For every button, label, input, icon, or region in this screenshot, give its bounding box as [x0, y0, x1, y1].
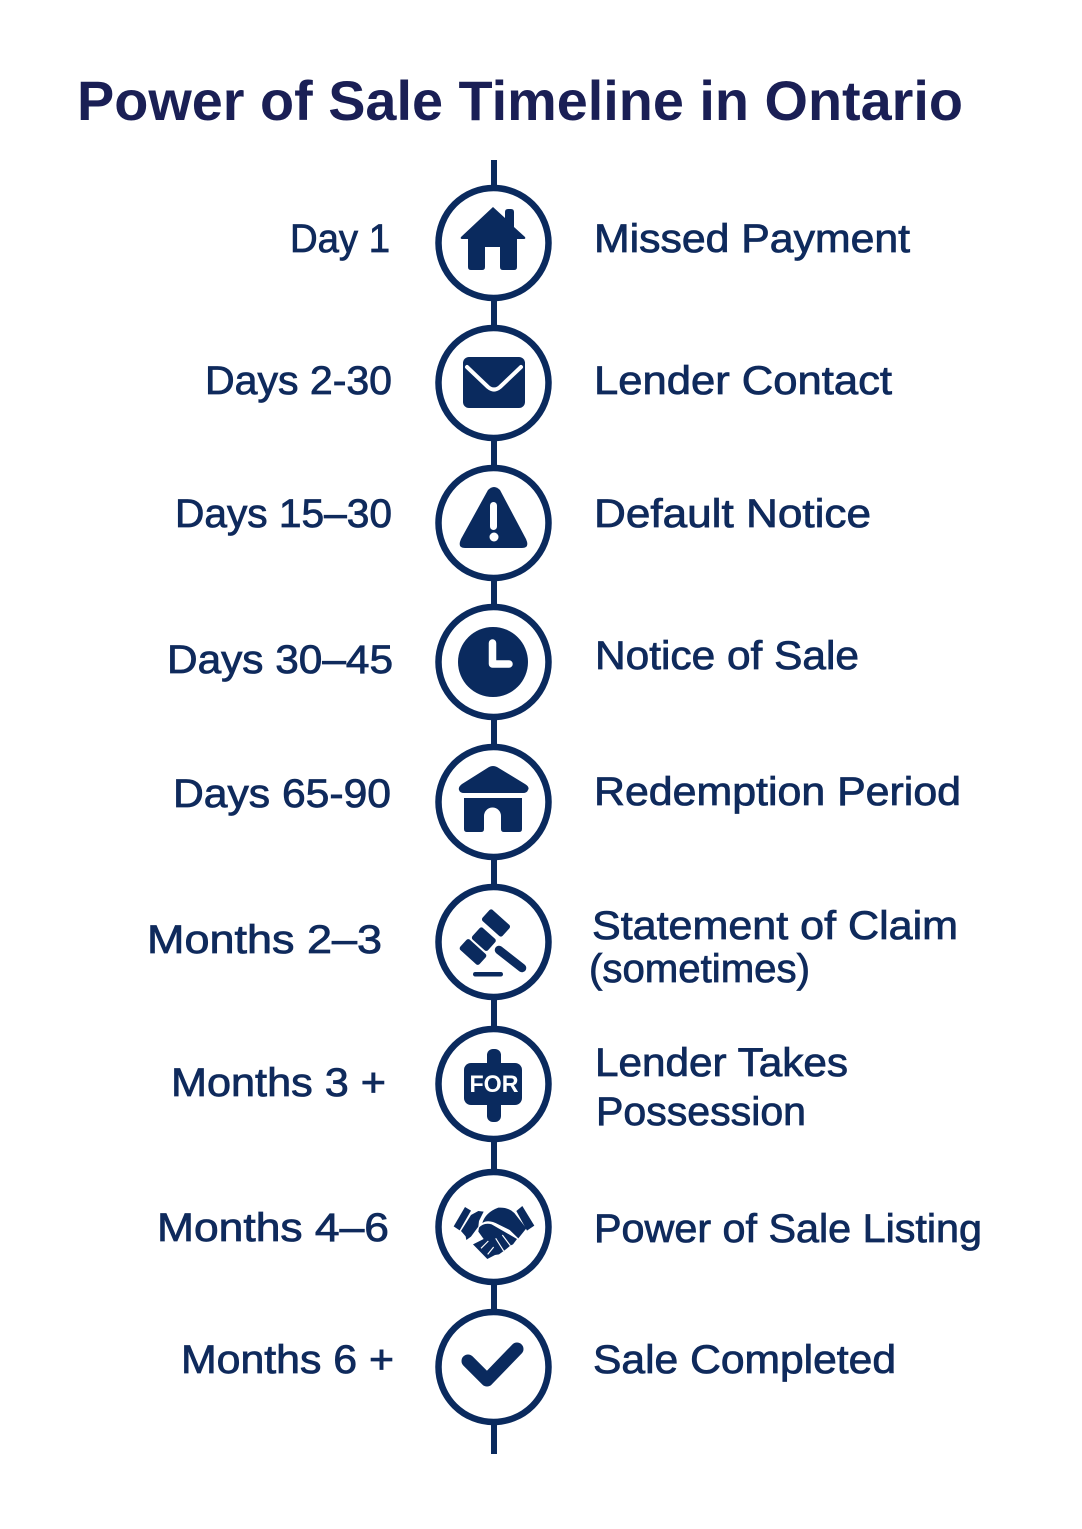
step 1: Day 1: Day 1: [290, 217, 390, 261]
step 1: Day 1: Missed Payment: [594, 217, 910, 261]
step 7: Months 3 +: Months 3 +: [171, 1061, 386, 1105]
step 7: Months 3 +: Possession: [596, 1090, 806, 1134]
step 6: Months 2–3: [147, 887, 958, 997]
step 9: Months 6 +: Sale Completed: [593, 1338, 896, 1382]
step 2: Days 2-30: [205, 328, 892, 438]
step 3: Days 15–30: [175, 468, 871, 578]
step 4: Days 30–45: [167, 607, 859, 717]
step 8: Months 4–6: Months 4–6: [157, 1206, 389, 1250]
step 3: Days 15–30: Default Notice: [594, 492, 871, 536]
step 2: Days 2-30: Lender Contact: [594, 359, 892, 403]
icon: handshake: [454, 1206, 534, 1259]
title: Power of Sale Timeline in Ontario: [77, 69, 963, 132]
step 1: Day 1: [290, 188, 910, 298]
step 8: Months 4–6: [157, 1172, 982, 1282]
step 7: Months 3 +: FOR: [470, 1071, 518, 1098]
timeline spine: [491, 160, 497, 1454]
step 7: Months 3 +: [171, 1029, 848, 1139]
step 4: Days 30–45: Notice of Sale: [595, 634, 859, 678]
step 2: Days 2-30: Days 2-30: [205, 359, 392, 403]
step 4: Days 30–45: Days 30–45: [167, 638, 393, 682]
step 7: Months 3 +: Lender Takes: [595, 1041, 848, 1085]
step 8: Months 4–6: Power of Sale Listing: [594, 1207, 982, 1251]
step 9: Months 6 +: Months 6 +: [181, 1338, 394, 1382]
step 5: Days 65-90: Redemption Period: [594, 770, 961, 814]
step 6: Months 2–3: (sometimes): [589, 947, 810, 991]
step 5: Days 65-90: [173, 747, 961, 857]
step 6: Months 2–3: Months 2–3: [147, 918, 382, 962]
step 3: Days 15–30: Days 15–30: [175, 492, 392, 536]
step 6: Months 2–3: Statement of Claim: [592, 904, 958, 948]
step 5: Days 65-90: Days 65-90: [173, 772, 391, 816]
step 9: Months 6 +: [181, 1312, 896, 1422]
